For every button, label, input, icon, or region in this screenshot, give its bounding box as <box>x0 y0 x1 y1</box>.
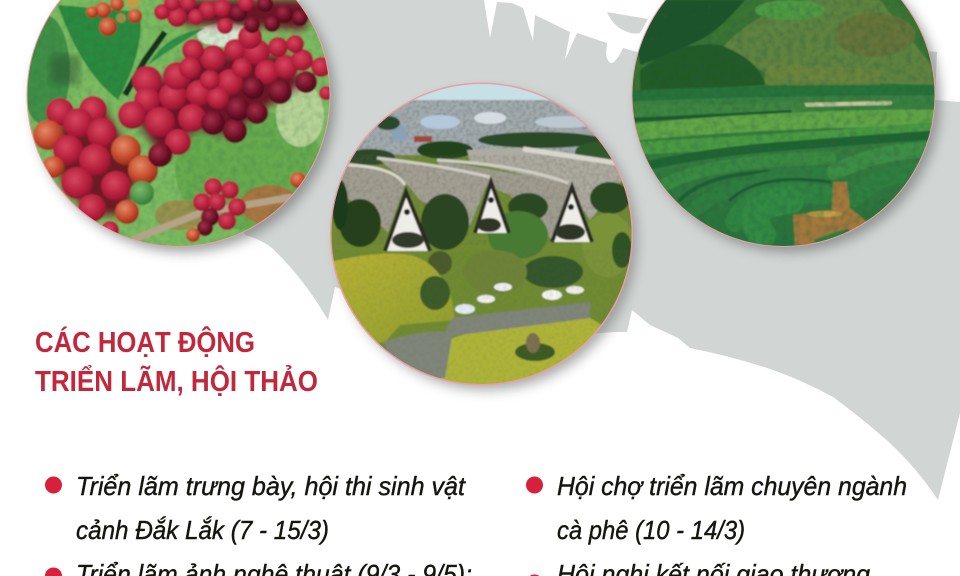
heading <box>35 325 318 398</box>
bullet item: hội chợ <box>526 471 907 545</box>
list column: right <box>526 471 907 576</box>
soil patch <box>793 182 867 245</box>
lawns and path <box>330 250 640 390</box>
berries <box>33 0 333 242</box>
list column: left <box>45 471 472 576</box>
photo: coffee berries <box>20 0 340 250</box>
bullet item: hội chợ: cà phê (10 - 14/3) <box>557 515 745 545</box>
bullet item: sinh vật cảnh: Triển lãm trưng bày, hội thi sinh vật <box>76 471 467 501</box>
photo: green tea hills <box>625 0 945 260</box>
shadows beneath photos <box>33 0 940 390</box>
bullet item: sinh vật cảnh <box>45 471 467 545</box>
bullet item: hội chợ: Hội chợ triển lãm chuyên ngành <box>557 471 907 501</box>
background torn grey shape <box>200 0 960 500</box>
bullet item: sinh vật cảnh: cảnh Đắk Lắk (7 - 15/3) <box>76 515 329 545</box>
heading: TRIỂN LÃM, HỘI THẢO <box>35 364 318 398</box>
tea rows <box>630 90 940 235</box>
heading: CÁC HOẠT ĐỘNG <box>35 325 255 359</box>
dark under-clusters <box>60 0 310 215</box>
museum triangular gables <box>385 182 592 251</box>
trees <box>332 180 634 294</box>
museum roofs <box>335 148 640 245</box>
photo: coffee museum aerial view <box>325 80 640 390</box>
